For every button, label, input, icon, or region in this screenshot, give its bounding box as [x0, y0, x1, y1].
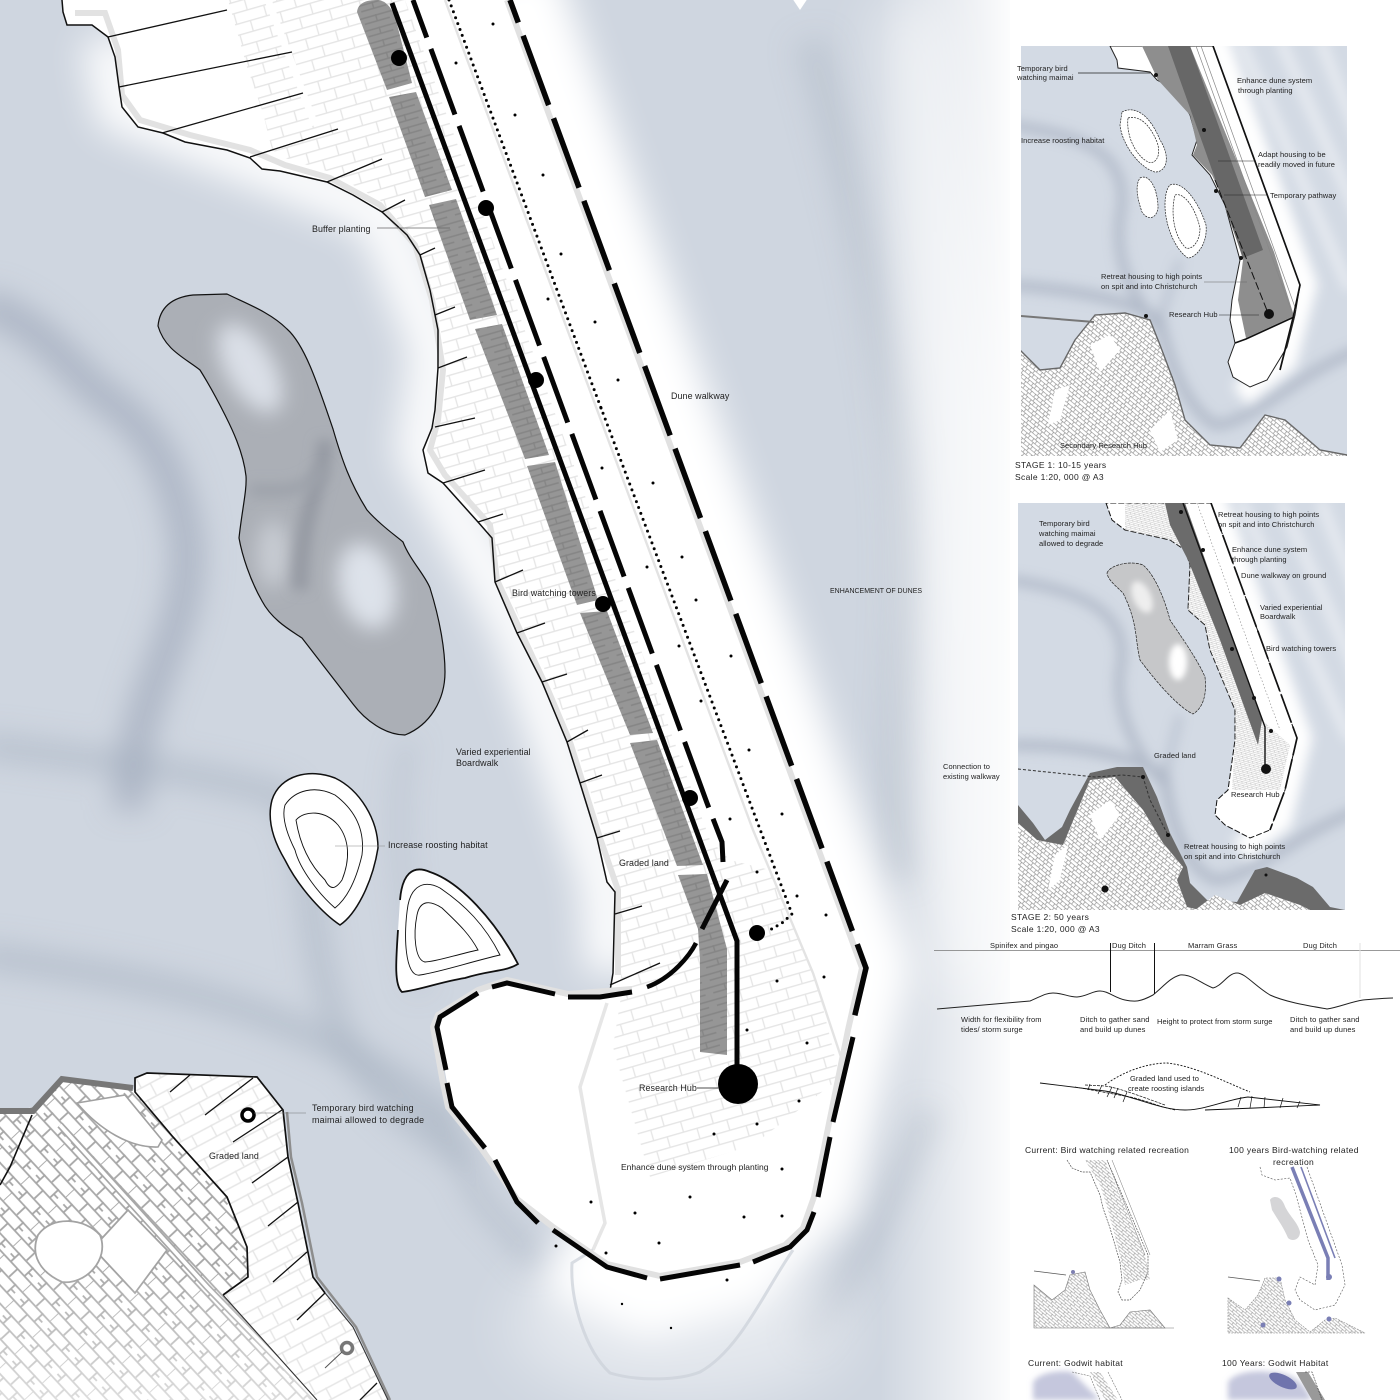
habitat blob: [1033, 1371, 1100, 1400]
island: [1270, 1197, 1300, 1240]
section lower notes: Height to protect from storm surge: [1157, 1017, 1272, 1026]
street grid: [0, 1075, 330, 1400]
annotation: temporary pathway: Temporary pathway: [1270, 191, 1336, 200]
spit hatch: [1085, 1160, 1150, 1285]
town: [1034, 1272, 1165, 1328]
stage 2 dark band: [1165, 503, 1262, 745]
pale shore road: [580, 1003, 607, 1250]
stage 1 connection line: [1021, 316, 1094, 322]
shoreline outline: [62, 0, 615, 991]
annotation: retreat housing: on spit and into Christchurch: [1101, 282, 1198, 291]
annotation: research hub: [1169, 310, 1259, 319]
stage 1 maimai dots: [1144, 73, 1274, 378]
temporary maimai ring marker: [242, 1109, 254, 1121]
section lower notes: Ditch to gather sand: [1290, 1015, 1360, 1024]
gray retreat housing bands: [357, 0, 727, 1055]
stage 1 right glow: [1213, 30, 1305, 395]
stage 1 caption: Scale 1:20, 000 @ A3: [1015, 472, 1104, 482]
annotation: retreat bottom: Retreat housing to high points: [1184, 842, 1285, 851]
diagram caption: Graded land used to: [1130, 1074, 1199, 1083]
graded land outline: [135, 1073, 325, 1295]
southern fade overlay: [0, 1270, 317, 1400]
dune walkway dotted path: [449, 0, 792, 931]
boardwalk dashed line: [413, 0, 723, 862]
annotation: towers: Bird watching towers: [1266, 644, 1336, 653]
experiential boardwalk lines: [392, 0, 792, 1070]
label: buffer planting: Buffer planting: [312, 224, 371, 234]
degrading mudflat island: [158, 294, 445, 735]
stage 2 water: [1018, 503, 1345, 910]
stage 2 degraded island: [1107, 563, 1206, 714]
stage 2 houses: [1125, 503, 1290, 790]
connection line: [1228, 1277, 1260, 1281]
annotation: maimai degrade: allowed to degrade: [1039, 539, 1103, 548]
pale walkway edge: [445, 0, 843, 1063]
section top labels: Spinifex and pingao: [990, 941, 1058, 950]
annotation: enhance dune: Enhance dune system: [1232, 545, 1307, 554]
section terrain: [937, 973, 1393, 1009]
annotation: retreat housing: Retreat housing to high points: [1101, 272, 1202, 281]
stage 1 medium grey housing: [1142, 46, 1294, 338]
park: [35, 1221, 102, 1282]
stage 1 town: [1015, 313, 1347, 460]
annotation: research hub: Research Hub: [1231, 790, 1280, 799]
label: research hub: Research Hub: [639, 1083, 697, 1093]
graded land to roosting islands diagram: [1040, 1063, 1320, 1110]
large central blocks: [93, 1210, 167, 1293]
boardwalk arc: [647, 943, 696, 987]
stage 2 caption: Scale 1:20, 000 @ A3: [1011, 924, 1100, 934]
annotation: maimai: Temporary bird: [1017, 64, 1068, 73]
section lower notes: and build up dunes: [1290, 1025, 1356, 1034]
planting dots: [454, 22, 828, 1329]
spit fragment: [1072, 1372, 1122, 1400]
stage 1 spit: [1110, 46, 1300, 387]
label: graded land, spit: Graded land: [619, 858, 669, 868]
stage 1 water: [1021, 46, 1347, 456]
graded land area: [130, 1070, 400, 1400]
road grid on spit: [200, 0, 860, 1200]
annotation: roosting habitat: Increase roosting habitat: [1021, 136, 1105, 145]
annotation: connection: Connection to: [943, 762, 990, 771]
annotation: boardwalk: Boardwalk: [1260, 612, 1296, 621]
graded land roads: [130, 1070, 400, 1400]
annotation: maimai: [1016, 64, 1150, 82]
stage 2 town open spaces: [1048, 800, 1120, 890]
label: temporary maimai: maimai allowed to degrade: [312, 1115, 424, 1125]
stage 2 towers and hub: [1179, 510, 1273, 774]
small map: 100 years godwit habitat: [1222, 1358, 1329, 1400]
spit outline: [1067, 1160, 1148, 1300]
research hub marker: [718, 1064, 758, 1104]
section lower notes: Ditch to gather sand: [1080, 1015, 1150, 1024]
annotation: adapt housing: [1218, 150, 1335, 169]
dune cross section: [934, 941, 1400, 1034]
boardwalk connector: [702, 880, 727, 929]
stage 1 annotations: [1016, 64, 1336, 450]
annotation: temporary pathway: [1224, 191, 1336, 200]
dotted arch: [1105, 1063, 1250, 1092]
wedge profile: [1040, 1083, 1320, 1110]
section lower notes: tides/ storm surge: [961, 1025, 1023, 1034]
annotation: maimai: watching maimai: [1016, 73, 1074, 82]
annotation: enhance dune: through planting: [1232, 555, 1287, 564]
annotation: retreat top: Retreat housing to high points: [1218, 510, 1319, 519]
stage 1 lines: [1196, 46, 1296, 310]
section lower notes: Width for flexibility from: [961, 1015, 1042, 1024]
label: enhance dune system: Enhance dune system through planting: [621, 1162, 769, 1172]
annotation: maimai degrade: Temporary bird: [1039, 519, 1090, 528]
core habitat: [1267, 1369, 1299, 1393]
label: increase roosting habitat: Increase roosting habitat: [388, 840, 488, 850]
annotation: maimai degrade: watching maimai: [1038, 529, 1096, 538]
roosting island 1: [270, 774, 378, 925]
annotation: enhance dune: through planting: [1238, 86, 1293, 95]
former southern spit outline: [572, 1250, 793, 1379]
stage 2 caption: STAGE 2: 50 years: [1011, 912, 1089, 922]
stage 2 walkway: [1018, 769, 1168, 835]
annotation: secondary hub: Secondary Research Hub: [1060, 441, 1147, 450]
label: buffer planting: [312, 224, 450, 234]
title: 100 years Bird-watching related: [1229, 1145, 1359, 1155]
small map: current godwit habitat: [1028, 1358, 1123, 1400]
label: temporary maimai: [254, 1103, 424, 1125]
north shoreline dashed: [1260, 1167, 1345, 1310]
annotation: retreat bottom: on spit and into Christchurch: [1184, 852, 1280, 861]
small map: current recreation: [1025, 1145, 1189, 1328]
small map: 100 years recreation: [1228, 1145, 1365, 1333]
spit fragment: [1296, 1372, 1325, 1400]
annotation: boardwalk: Varied experiential: [1260, 603, 1323, 612]
panel: stage 2 inset map: [943, 490, 1360, 934]
section top labels: [990, 941, 1337, 950]
habitat blob: [1228, 1371, 1312, 1400]
graded land hatches: [170, 1075, 377, 1400]
buffer planting strip: [75, 13, 618, 975]
section top labels: Dug Ditch: [1112, 941, 1146, 950]
annotation: dune walkway: Dune walkway on ground: [1241, 571, 1326, 580]
white street corridor: [268, 0, 315, 125]
annotation: enhance dune: Enhance dune system: [1237, 76, 1312, 85]
label: dune walkway: Dune walkway: [671, 391, 730, 401]
annotation: adapt housing: readily moved in future: [1258, 160, 1335, 169]
boardwalk main line: [392, 3, 737, 1070]
annotation: retreat housing: [1101, 272, 1247, 291]
section top labels: Marram Grass: [1188, 941, 1237, 950]
section lower notes: and build up dunes: [1080, 1025, 1146, 1034]
shoreline shadow: [0, 1079, 133, 1111]
connection line: [1034, 1271, 1066, 1275]
graded land hatch ticks: [108, 10, 660, 985]
section dividers: [1110, 943, 1154, 994]
section lower notes: [961, 1015, 1360, 1034]
outer coast shadow: [287, 1112, 390, 1400]
section datum line: [934, 950, 1400, 952]
purple boardwalk bands: [1292, 1167, 1328, 1280]
annotation: connection: existing walkway: [943, 772, 1000, 781]
section top labels: Dug Ditch: [1303, 941, 1337, 950]
label: varied experiential boardwalk: Varied experiential: [456, 747, 531, 757]
access point: [1071, 1270, 1075, 1274]
annotation: graded land: Graded land: [1154, 751, 1196, 760]
title: Current: Bird watching related recreation: [1025, 1145, 1189, 1155]
annotation: retreat top: on spit and into Christchurch: [1218, 520, 1314, 529]
stage 2 spit: [1106, 503, 1297, 838]
dune walkway: outer dashed line with pale underlay: [433, 0, 866, 1279]
hatch ticks: [1088, 1084, 1300, 1108]
arterial road: [60, 1125, 317, 1400]
stage 2 boardwalk: [1183, 503, 1265, 770]
panel: spit land mass: [62, 0, 865, 1279]
reserve: [77, 1095, 162, 1147]
roosting island 2: [396, 869, 518, 992]
stage 1 caption: STAGE 1: 10-15 years: [1015, 460, 1106, 470]
title: Current: Godwit habitat: [1028, 1358, 1123, 1368]
annotation: adapt housing: Adapt housing to be: [1258, 150, 1326, 159]
west hatch line: [0, 1115, 32, 1185]
town: [1228, 1278, 1365, 1333]
town: Christchurch street network: [0, 1075, 330, 1400]
label: temporary maimai: Temporary bird watching: [312, 1103, 414, 1113]
diagram caption: create roosting islands: [1128, 1084, 1204, 1093]
spit landform: [62, 0, 865, 1279]
stage 2 town buffer: [1018, 767, 1345, 915]
stage 1 roosting islands: [1120, 110, 1206, 258]
annotation: research hub: Research Hub: [1169, 310, 1218, 319]
main map labels and leaders: [209, 224, 922, 1172]
label: varied experiential boardwalk: Boardwalk: [456, 758, 499, 768]
stage 1 dark band: [1168, 46, 1263, 258]
stage 2 town: [1018, 777, 1200, 910]
stage 2 right glow: [1211, 490, 1300, 850]
label: graded land, town: Graded land: [209, 1151, 259, 1161]
title: 100 Years: Godwit Habitat: [1222, 1358, 1329, 1368]
stage 2 coastal dots: [1102, 775, 1268, 892]
title second line: recreation: [1273, 1157, 1314, 1167]
stage 2 annotations: [943, 510, 1336, 861]
label: enhancement of dunes: ENHANCEMENT OF DUNES: [830, 588, 922, 595]
stage 1 town open spaces: [1048, 335, 1178, 452]
baseline: [1105, 1327, 1174, 1329]
panel: stage 1 inset map: [1010, 30, 1360, 482]
bird watching towers: [391, 50, 765, 941]
hub marker: [1326, 1274, 1332, 1280]
faded maimai ring marker: [342, 1342, 352, 1354]
purple access dots: [1260, 1276, 1332, 1328]
label: bird watching towers: Bird watching towers: [512, 588, 596, 598]
